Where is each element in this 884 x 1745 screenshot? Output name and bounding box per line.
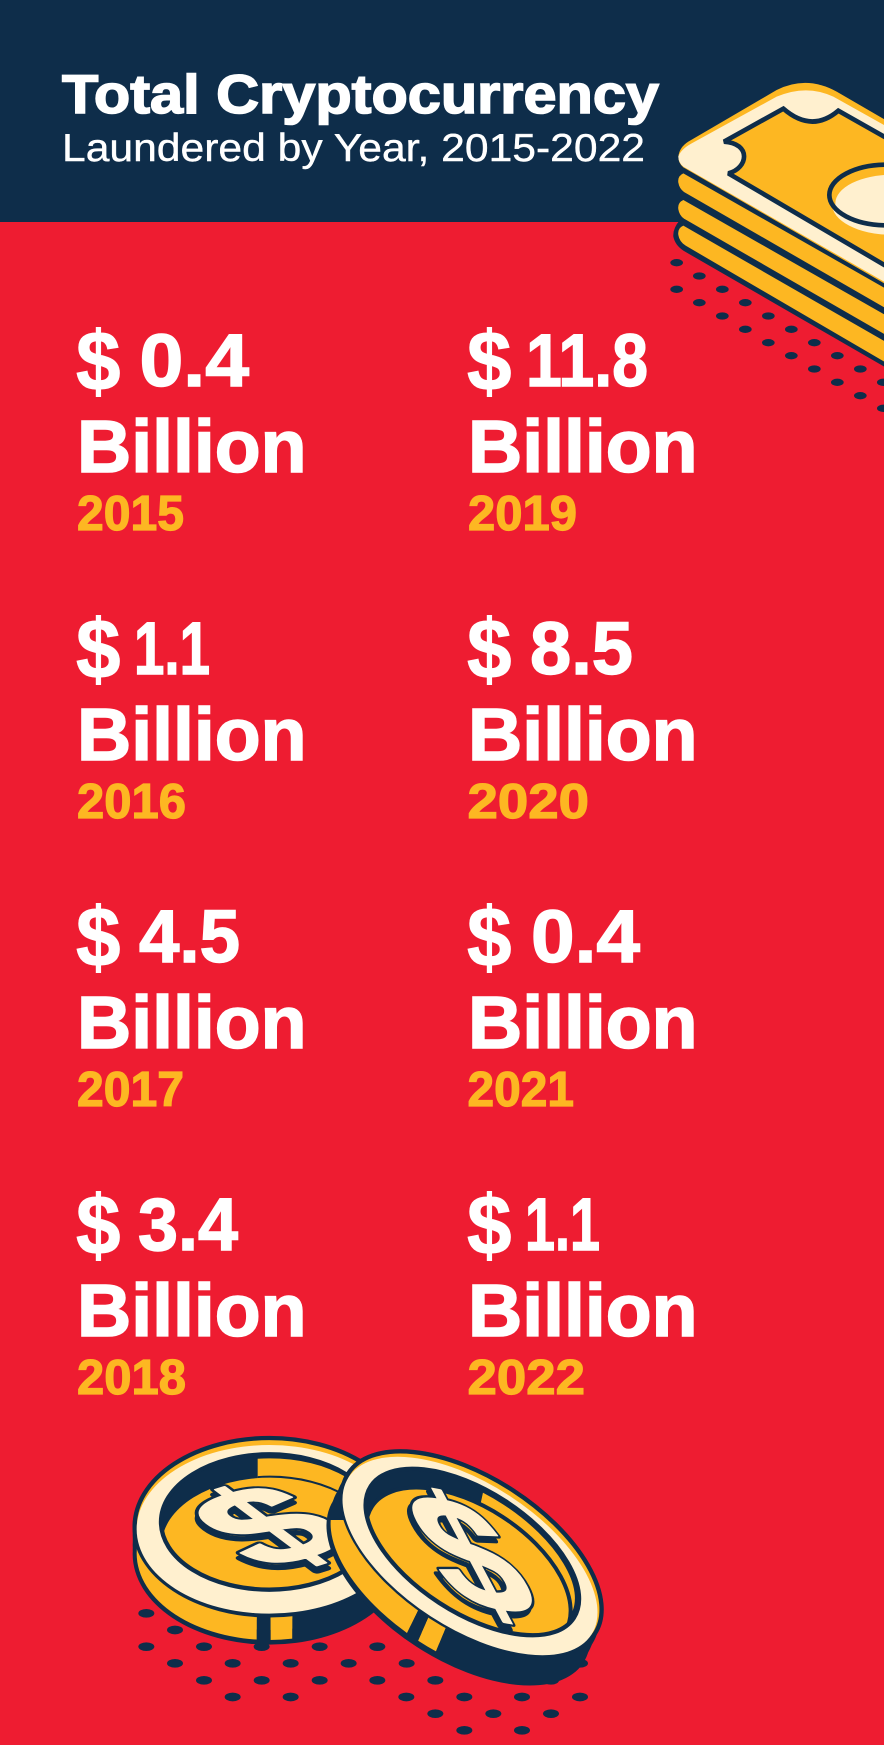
note medallion bbox=[829, 165, 884, 235]
coin rim bbox=[307, 1410, 636, 1697]
top note gold edge bbox=[678, 83, 884, 287]
stat: 2022: Billion bbox=[468, 1269, 698, 1352]
title: Laundered by Year, 2015-2022 bbox=[62, 127, 645, 170]
stat: 2015: $ bbox=[76, 314, 120, 408]
stat: 2019: Billion bbox=[468, 405, 698, 488]
stat: 2017: 4.5 bbox=[139, 895, 240, 978]
stat: 2021: 0.4 bbox=[531, 895, 640, 978]
stat: 2021: $ bbox=[467, 890, 512, 984]
stat: 2019: 2019 bbox=[468, 487, 577, 541]
left coin dollar sign: $ bbox=[151, 1458, 386, 1592]
left coin dollar sign: $ bbox=[151, 1464, 386, 1597]
illustration: coins bbox=[132, 1436, 604, 1735]
stat: 2021 bbox=[467, 890, 698, 1117]
title: Total Cryptocurrency bbox=[62, 63, 659, 125]
stat: 2016: Billion bbox=[77, 693, 306, 776]
stat: 2022 bbox=[467, 1178, 698, 1405]
left coin dollar sign: $ bbox=[151, 1458, 386, 1592]
stat: 2022: $ bbox=[467, 1178, 512, 1272]
right coin dollar sign: $ bbox=[377, 1455, 565, 1654]
stat: 2018: 3.4 bbox=[138, 1183, 238, 1266]
shadow dots bbox=[138, 1609, 588, 1735]
stat: 2020: 2020 bbox=[468, 775, 589, 829]
stat: 2017 bbox=[76, 890, 306, 1117]
coin edge bbox=[291, 1407, 639, 1728]
stat: 2020: $ bbox=[467, 602, 512, 696]
stat: 2015 bbox=[76, 314, 306, 541]
stat: 2019: $ bbox=[467, 314, 512, 408]
stat: 2016: 1.1 bbox=[134, 607, 210, 690]
stat: 2015: 0.4 bbox=[140, 319, 249, 402]
shadow dots bbox=[670, 259, 884, 412]
stat: 2020: 8.5 bbox=[530, 607, 633, 690]
stat: 2016 bbox=[76, 602, 306, 829]
stat: 2021: Billion bbox=[468, 981, 698, 1064]
stat: 2017: 2017 bbox=[77, 1063, 184, 1117]
stat: 2017: Billion bbox=[77, 981, 306, 1064]
stat: 2022: 2022 bbox=[468, 1351, 585, 1405]
stat: 2020: Billion bbox=[468, 693, 698, 776]
coin edge bbox=[133, 1437, 406, 1645]
stat: 2016: 2016 bbox=[77, 775, 186, 829]
stat: 2018 bbox=[76, 1178, 306, 1405]
stat: 2018: 2018 bbox=[77, 1351, 186, 1405]
stat: 2022: 1.1 bbox=[525, 1183, 600, 1266]
stat: 2019: 11.8 bbox=[526, 319, 648, 402]
stack outline bbox=[673, 160, 884, 370]
note centre panel bbox=[724, 109, 884, 268]
top note face bbox=[678, 90, 884, 285]
note layers bbox=[678, 173, 884, 365]
right coin bbox=[326, 1449, 604, 1686]
stat: 2015: Billion bbox=[77, 405, 306, 488]
left coin bbox=[132, 1436, 374, 1645]
right coin dollar sign: $ bbox=[375, 1460, 562, 1659]
stat: 2020 bbox=[467, 602, 698, 829]
coin rim bbox=[135, 1438, 404, 1615]
stat: 2017: $ bbox=[76, 890, 120, 984]
stat: 2016: $ bbox=[76, 602, 120, 696]
header band bbox=[0, 0, 884, 222]
stat: 2015: 2015 bbox=[77, 487, 184, 541]
coin recess bbox=[161, 1454, 378, 1590]
stat: 2019 bbox=[467, 314, 698, 541]
illustration: banknote stack bbox=[670, 83, 884, 412]
stat: 2018: Billion bbox=[77, 1269, 306, 1352]
stat: 2018: $ bbox=[76, 1178, 120, 1272]
title bbox=[62, 63, 659, 170]
stat: 2021: 2021 bbox=[468, 1063, 574, 1117]
right coin dollar sign: $ bbox=[377, 1455, 565, 1654]
coin recess bbox=[338, 1435, 607, 1669]
